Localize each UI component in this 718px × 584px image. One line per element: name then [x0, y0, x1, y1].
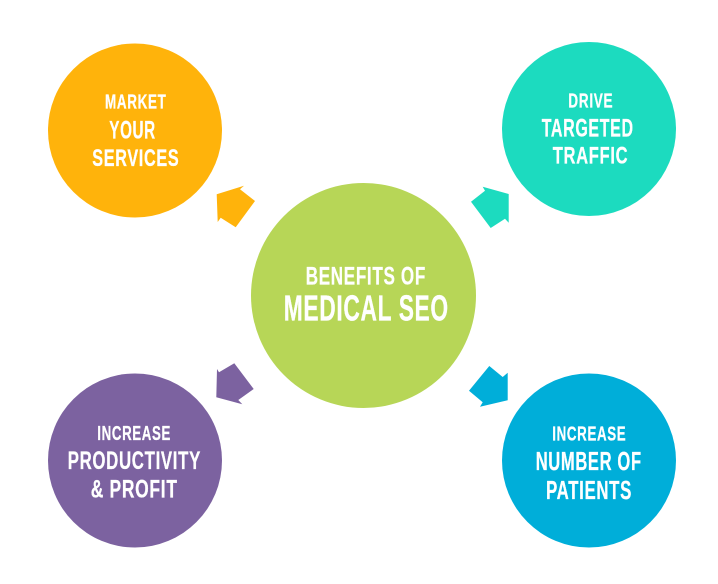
arrow: centre to drive targeted traffic — [471, 187, 509, 228]
label: drive targeted traffic: TRAFFIC — [553, 143, 628, 170]
panel: increase number of patients — [502, 374, 676, 548]
label: drive targeted traffic: TARGETED — [542, 115, 634, 143]
label: market your services: SERVICES — [92, 145, 179, 172]
panel: central benefits of medical SEO — [251, 183, 476, 408]
purple circle — [48, 374, 222, 548]
panel: drive targeted traffic — [502, 42, 676, 216]
panel: market your services — [48, 44, 222, 218]
label: increase number of patients — [536, 423, 642, 505]
label: increase productivity and profit: INCREASE — [97, 422, 171, 445]
panel: increase productivity and profit — [48, 374, 222, 548]
arrow: centre to market your services — [217, 186, 255, 227]
label: increase productivity and profit: PRODUCTIVITY — [68, 447, 201, 475]
label: drive targeted traffic — [542, 91, 634, 170]
orange circle — [48, 44, 222, 218]
label: increase number of patients: INCREASE — [552, 423, 626, 446]
teal circle — [502, 42, 676, 216]
label: increase productivity and profit: & PROFIT — [91, 476, 178, 504]
label: market your services — [92, 91, 179, 172]
title: benefits of medical SEO — [284, 262, 449, 328]
blue circle — [502, 374, 676, 548]
title: benefits of medical SEO: MEDICAL SEO — [284, 288, 449, 328]
green circle — [251, 183, 476, 408]
label: market your services: YOUR — [109, 116, 156, 144]
arrow: centre to increase productivity and profit — [216, 363, 254, 404]
arrow: centre to increase number of patients — [469, 366, 508, 407]
label: market your services: MARKET — [105, 91, 166, 113]
label: drive targeted traffic: DRIVE — [568, 91, 613, 113]
label: increase number of patients: NUMBER OF — [536, 446, 642, 476]
label: increase productivity and profit — [68, 422, 201, 504]
label: increase number of patients: PATIENTS — [546, 477, 632, 505]
title: benefits of medical SEO: BENEFITS OF — [306, 262, 426, 290]
